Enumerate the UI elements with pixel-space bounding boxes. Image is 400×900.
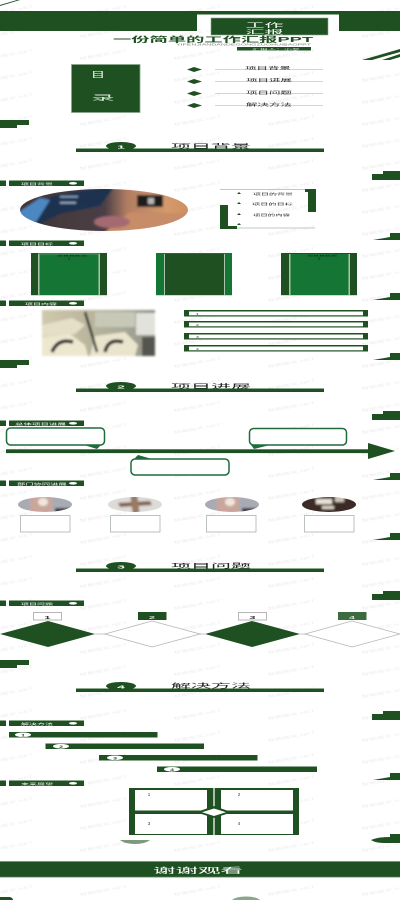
background list: [220, 189, 316, 229]
callout 3: [131, 455, 229, 475]
section heading 3: [76, 562, 324, 572]
presenter tag: [237, 47, 311, 51]
section heading 4: [76, 682, 324, 692]
outlook quad panel: 1: [148, 792, 151, 797]
outlook quad panel: 3: [148, 821, 151, 826]
problem diagram: 2: [149, 614, 155, 620]
content bars: 3: [196, 335, 200, 339]
photo: laptop: [20, 189, 188, 231]
goal card 2: [156, 253, 232, 295]
contents list: 项目问题: [246, 90, 293, 95]
sub label: problems: 项目问题: [21, 602, 53, 606]
goal card 1: 1: [68, 257, 70, 260]
banner heading: [246, 22, 283, 35]
photo circle 3: [205, 497, 259, 512]
banner heading: 工作: [246, 22, 283, 29]
footer banner: [0, 861, 400, 878]
sub label: outlook: [0, 780, 84, 786]
contents list: [187, 65, 323, 108]
subtitle: YIFENJIANDANDEGONGZUOHUIBAOPPT: [176, 44, 313, 46]
section heading 2: 项目进展: [171, 383, 251, 390]
presenter tag: 汇报人：小罗: [252, 48, 300, 51]
sub label: background: [0, 180, 84, 186]
solution steps: 3: [113, 757, 117, 761]
sub label: overall progress: [0, 420, 84, 426]
section heading 3: 3: [117, 565, 125, 570]
banner heading: 汇报: [246, 29, 283, 35]
sub label: solutions: [0, 720, 84, 726]
half circle accent bottom: [232, 896, 260, 900]
outlook quad panel: 4: [238, 821, 241, 826]
background list: 项目的目标: [252, 202, 293, 206]
solution steps: 4: [170, 768, 175, 772]
sub label: overall progress: 总体项目进展: [15, 421, 67, 426]
goal card 1: [31, 253, 107, 295]
sub label: content: 项目内容: [25, 302, 57, 306]
section heading 2: 2: [117, 385, 125, 390]
goal card 3: 2: [318, 257, 320, 260]
contents box: 目: [91, 71, 105, 79]
sub label: background: 项目背景: [21, 182, 53, 186]
timeline arrow: [6, 443, 395, 459]
sub label: outlook: 未来展望: [21, 782, 53, 786]
solution steps: 1: [21, 734, 25, 738]
outlook quad panel: [129, 788, 299, 835]
background list: 项目的背景: [253, 192, 293, 196]
outlook quad panel: 2: [238, 792, 241, 797]
contents list: 解决方法: [246, 102, 293, 107]
sub label: solutions: 解决方法: [21, 722, 53, 726]
goal card 3: 项目目标项: [307, 254, 338, 257]
photo circle 2: [108, 497, 162, 512]
section heading 4: 解决方法: [171, 683, 251, 690]
background list: 项目的内容: [253, 213, 290, 217]
section heading 3: 项目问题: [171, 563, 251, 570]
problem diagram: 1: [44, 614, 51, 620]
title: 一份简单的工作汇报PPT: [113, 35, 313, 44]
goal card 1: 项目目标项: [57, 254, 88, 257]
section heading 1: [76, 142, 324, 152]
callout 2: [250, 428, 346, 449]
content bars: 4: [196, 347, 200, 351]
contents list: 项目背景: [245, 65, 292, 70]
contents box: [72, 64, 140, 112]
content bars: [184, 310, 368, 352]
photo circle 1: [18, 497, 72, 512]
content bars: 1: [196, 312, 200, 316]
problem diagram: 4: [349, 614, 355, 620]
contents list: 项目进展: [246, 78, 293, 82]
header banner: [0, 11, 400, 35]
problem diagram: 3: [249, 614, 256, 620]
solution steps: 2: [59, 745, 63, 749]
sub label: goals: [0, 240, 84, 246]
goal card 3: [281, 253, 357, 295]
section heading 1: 项目背景: [171, 143, 251, 150]
section heading 2: [76, 382, 324, 392]
text boxes: [20, 516, 354, 532]
photo circle 4: [302, 497, 356, 512]
section heading 4: 4: [117, 685, 125, 690]
content bars: 2: [196, 323, 200, 327]
sub label: content: [0, 300, 84, 306]
sub label: goals: 项目目标: [21, 242, 53, 246]
footer banner: 谢谢观看: [153, 867, 243, 875]
sub label: team: 部门协同进展: [17, 482, 67, 486]
section heading 1: 1: [117, 145, 125, 150]
sub label: problems: [0, 600, 84, 606]
sub label: team: [0, 480, 84, 486]
callout 1: [6, 428, 104, 449]
contents box: 录: [92, 94, 115, 102]
half circle accent: [120, 840, 150, 844]
solution steps: [9, 732, 317, 772]
problem diagram: [0, 612, 400, 647]
photo: robot arms: [42, 310, 155, 356]
